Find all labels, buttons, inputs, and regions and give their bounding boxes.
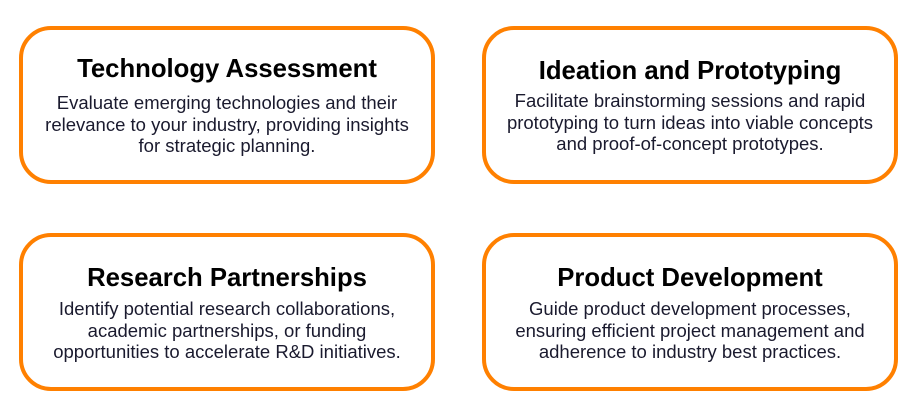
text: Research Partnerships description: opportunities to accelerate R&D initiatives. — [53, 341, 401, 362]
text: Product Development description — [515, 298, 865, 362]
heading: Technology Assessment: Technology Assessment — [77, 55, 377, 83]
text: Research Partnerships description: academic partnerships, or funding — [88, 320, 366, 340]
panel: Technology Assessment — [19, 26, 435, 184]
text: Product Development description: Guide product development processes, — [529, 298, 851, 319]
panel: Ideation and Prototyping — [482, 26, 898, 184]
text: Ideation and Prototyping description: prototyping to turn ideas into viable concepts — [507, 112, 873, 132]
heading: Ideation and Prototyping: Ideation and Prototyping — [539, 57, 841, 85]
text: Research Partnerships description — [53, 298, 401, 362]
heading: Product Development: Product Development — [557, 264, 823, 292]
text: Ideation and Prototyping description: and proof-of-concept prototypes. — [556, 133, 824, 154]
text: Technology Assessment description: relevance to your industry, providing insights — [45, 114, 409, 134]
text: Product Development description: adherence to industry best practices. — [539, 341, 841, 362]
panel: Product Development — [482, 233, 898, 391]
text: Product Development description: ensuring efficient project management and — [515, 320, 865, 340]
text: Research Partnerships description: Identify potential research collaborations, — [59, 298, 395, 319]
heading: Research Partnerships: Research Partnerships — [87, 264, 367, 292]
text: Ideation and Prototyping description — [507, 90, 873, 154]
text: Ideation and Prototyping description: Facilitate brainstorming sessions and rapid — [515, 90, 865, 111]
text: Technology Assessment description — [45, 92, 409, 156]
text: Technology Assessment description: Evaluate emerging technologies and their — [57, 92, 397, 113]
text: Technology Assessment description: for strategic planning. — [139, 135, 315, 156]
panel: Research Partnerships — [19, 233, 435, 391]
